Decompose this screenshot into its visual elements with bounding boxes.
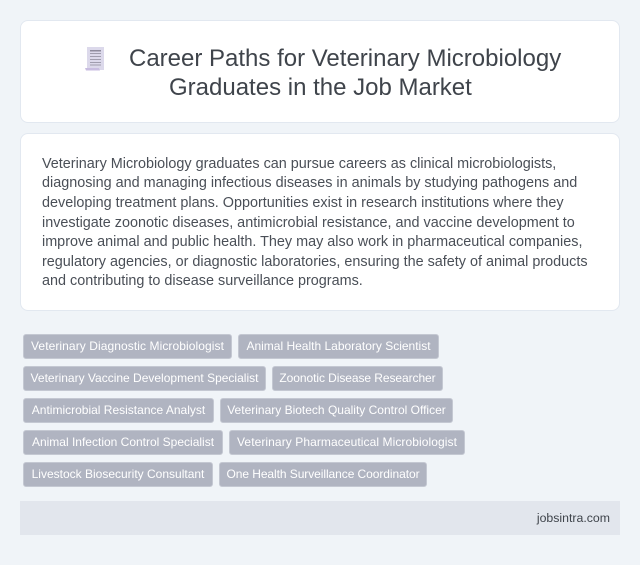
tag <box>23 398 214 423</box>
description text: investigate zoonotic diseases, antimicrobial resistance, and vaccine development to <box>42 215 575 231</box>
description text: and contributing to disease surveillance programs. <box>42 273 363 289</box>
tag: Veterinary Diagnostic Microbiologist <box>31 339 224 353</box>
description text: diagnosing and managing infectious diseases in animals by studying pathogens and <box>42 175 577 191</box>
tag <box>219 462 427 487</box>
job tags <box>23 334 465 487</box>
description text: developing treatment plans. Opportunities exist in research institutions where they <box>42 195 564 211</box>
tag <box>272 366 443 391</box>
tag <box>23 430 223 455</box>
tag: Animal Health Laboratory Scientist <box>246 339 431 353</box>
tag <box>23 462 213 487</box>
tag <box>238 334 439 359</box>
title: Graduates in the Job Market <box>169 74 472 101</box>
description panel <box>20 133 620 311</box>
tag: Veterinary Pharmaceutical Microbiologist <box>237 435 457 449</box>
description text: Veterinary Microbiology graduates can pursue careers as clinical microbiologists, <box>42 156 556 172</box>
description text <box>42 156 588 289</box>
tag: Veterinary Vaccine Development Specialist <box>31 371 258 385</box>
tag <box>229 430 465 455</box>
description text: improve animal and public health. They may also work in pharmaceutical companies, <box>42 234 582 250</box>
title <box>129 45 562 101</box>
tag: Zoonotic Disease Researcher <box>279 371 436 385</box>
tag: One Health Surveillance Coordinator <box>226 467 420 481</box>
icon: document scroll <box>85 47 104 70</box>
tag: Antimicrobial Resistance Analyst <box>32 403 205 417</box>
title: Career Paths for Veterinary Microbiology <box>129 45 561 72</box>
footer bar <box>20 501 620 535</box>
description text: regulatory agencies, or diagnostic laboratories, ensuring the safety of animal products <box>42 254 588 270</box>
header panel <box>20 20 620 123</box>
tag <box>23 366 266 391</box>
tag <box>220 398 453 423</box>
tag: Veterinary Biotech Quality Control Officer <box>227 403 446 417</box>
tag <box>23 334 232 359</box>
tag: Livestock Biosecurity Consultant <box>32 467 204 481</box>
footer text: jobsintra.com <box>537 511 610 525</box>
tag: Animal Infection Control Specialist <box>32 435 214 449</box>
